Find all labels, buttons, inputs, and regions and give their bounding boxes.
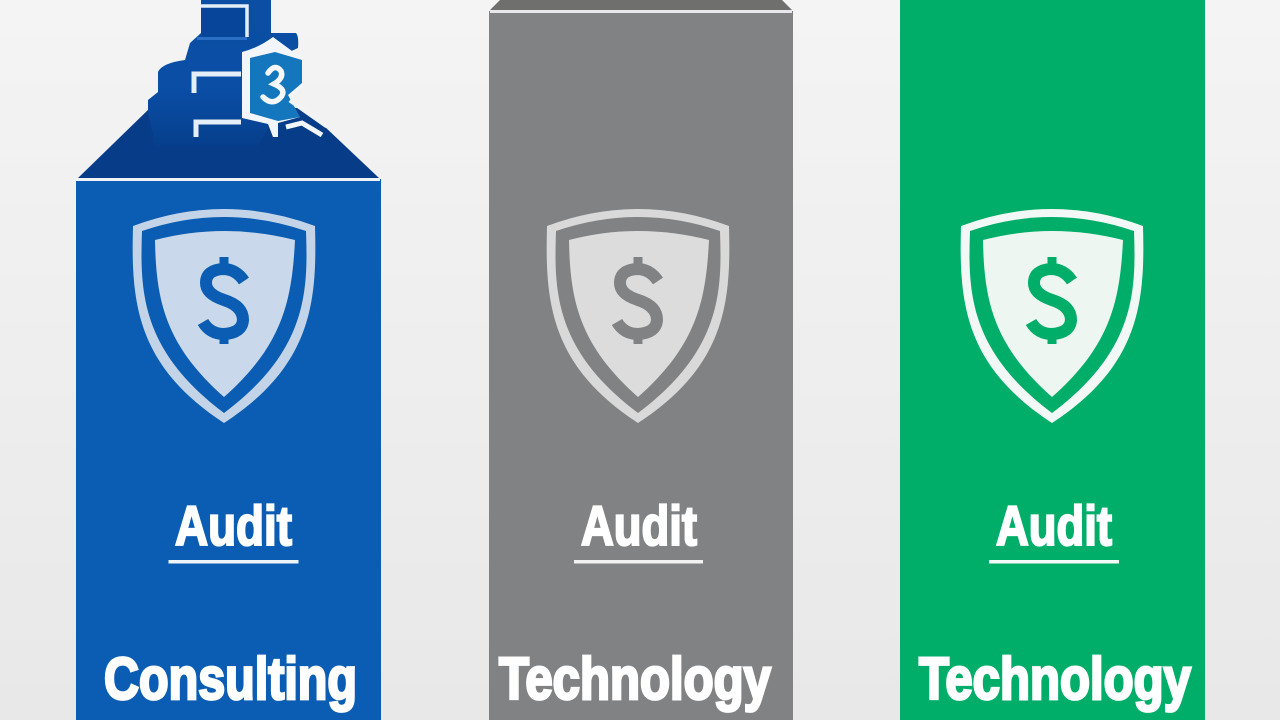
column body bbox=[900, 0, 1205, 720]
icon: shield with dollar sign bbox=[133, 209, 315, 423]
icon: shield with dollar sign bbox=[547, 209, 729, 423]
underline bbox=[168, 560, 298, 564]
panel: grey column bbox=[489, 0, 793, 720]
icon: shield with dollar sign bbox=[961, 209, 1143, 423]
label: Audit: Audit bbox=[175, 494, 292, 557]
column roof bbox=[78, 108, 379, 178]
column roof bbox=[490, 0, 792, 10]
label: Audit: Audit bbox=[996, 494, 1112, 557]
panel: green column bbox=[900, 0, 1205, 720]
underline bbox=[574, 560, 703, 564]
label: Consulting: Consulting bbox=[104, 646, 357, 712]
label: Technology: Technology bbox=[499, 646, 771, 712]
icon: stacked buildings with shield bbox=[148, 0, 327, 146]
panel: blue column bbox=[76, 0, 381, 720]
column body bbox=[76, 179, 381, 720]
label: Audit: Audit bbox=[581, 494, 697, 557]
label: Technology: Technology bbox=[919, 646, 1191, 712]
underline bbox=[989, 560, 1119, 564]
column body bbox=[489, 11, 793, 720]
